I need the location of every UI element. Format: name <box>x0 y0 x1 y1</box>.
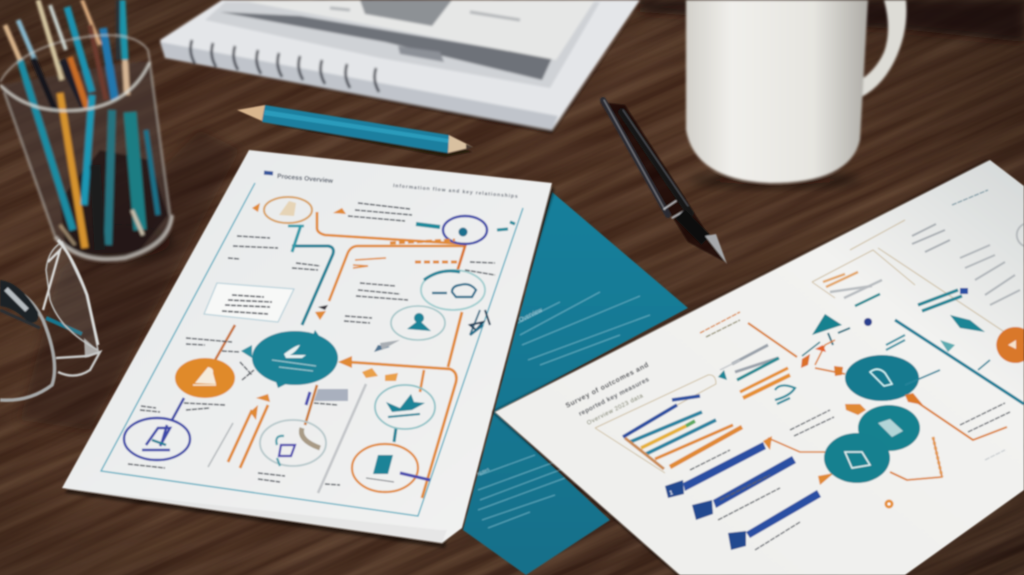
sheet heading: Survey of outcomes and <box>565 362 650 410</box>
white mug <box>686 0 906 188</box>
small text labels <box>690 190 1010 550</box>
orange ring circle <box>352 444 430 492</box>
small markers <box>718 224 1024 508</box>
flow connectors <box>172 212 480 498</box>
connectors <box>748 320 1024 480</box>
sheet heading: Information flow and key relationships <box>393 183 518 200</box>
teal folder sheet: Notes <box>476 466 491 478</box>
frame lines <box>595 220 1024 473</box>
arrows and small markers <box>250 240 490 420</box>
bar chart <box>623 396 742 469</box>
sheet heading: Overview 2023 data <box>586 393 645 427</box>
pale grey circle <box>260 420 326 466</box>
blue long bars: 1 <box>669 490 674 497</box>
sheet frame <box>101 183 523 516</box>
pale ring with person icon <box>391 306 445 340</box>
orange circle <box>175 358 235 398</box>
tan circle, top <box>252 197 346 223</box>
pale ring, right <box>421 270 485 310</box>
indigo circle <box>124 418 190 460</box>
teal folder sheet: Overview <box>518 307 544 324</box>
sheet heading: reported key measures <box>578 376 651 418</box>
pencil cup <box>0 0 173 260</box>
pencil on desk <box>237 105 473 157</box>
notebook and papers stack <box>160 0 640 134</box>
orange circle at edge <box>996 327 1024 363</box>
text box, left <box>204 283 294 322</box>
top-right bars <box>823 224 1020 311</box>
sheet heading <box>264 171 518 200</box>
pale teal circle, lower right <box>375 385 435 429</box>
pens on desk <box>600 100 727 264</box>
teal folder sheet <box>463 192 688 575</box>
blue long bars <box>665 436 834 550</box>
teal triangle icon <box>812 314 850 345</box>
sheet heading: Process Overview <box>277 173 334 185</box>
upper bars <box>720 345 790 398</box>
left infographic sheet <box>62 150 555 548</box>
eyeglasses <box>0 240 100 400</box>
right infographic sheet <box>492 160 1024 575</box>
central teal circle <box>241 330 338 388</box>
indigo ring, top right <box>416 216 515 244</box>
teal circles <box>824 355 920 483</box>
small text labels <box>128 203 495 485</box>
